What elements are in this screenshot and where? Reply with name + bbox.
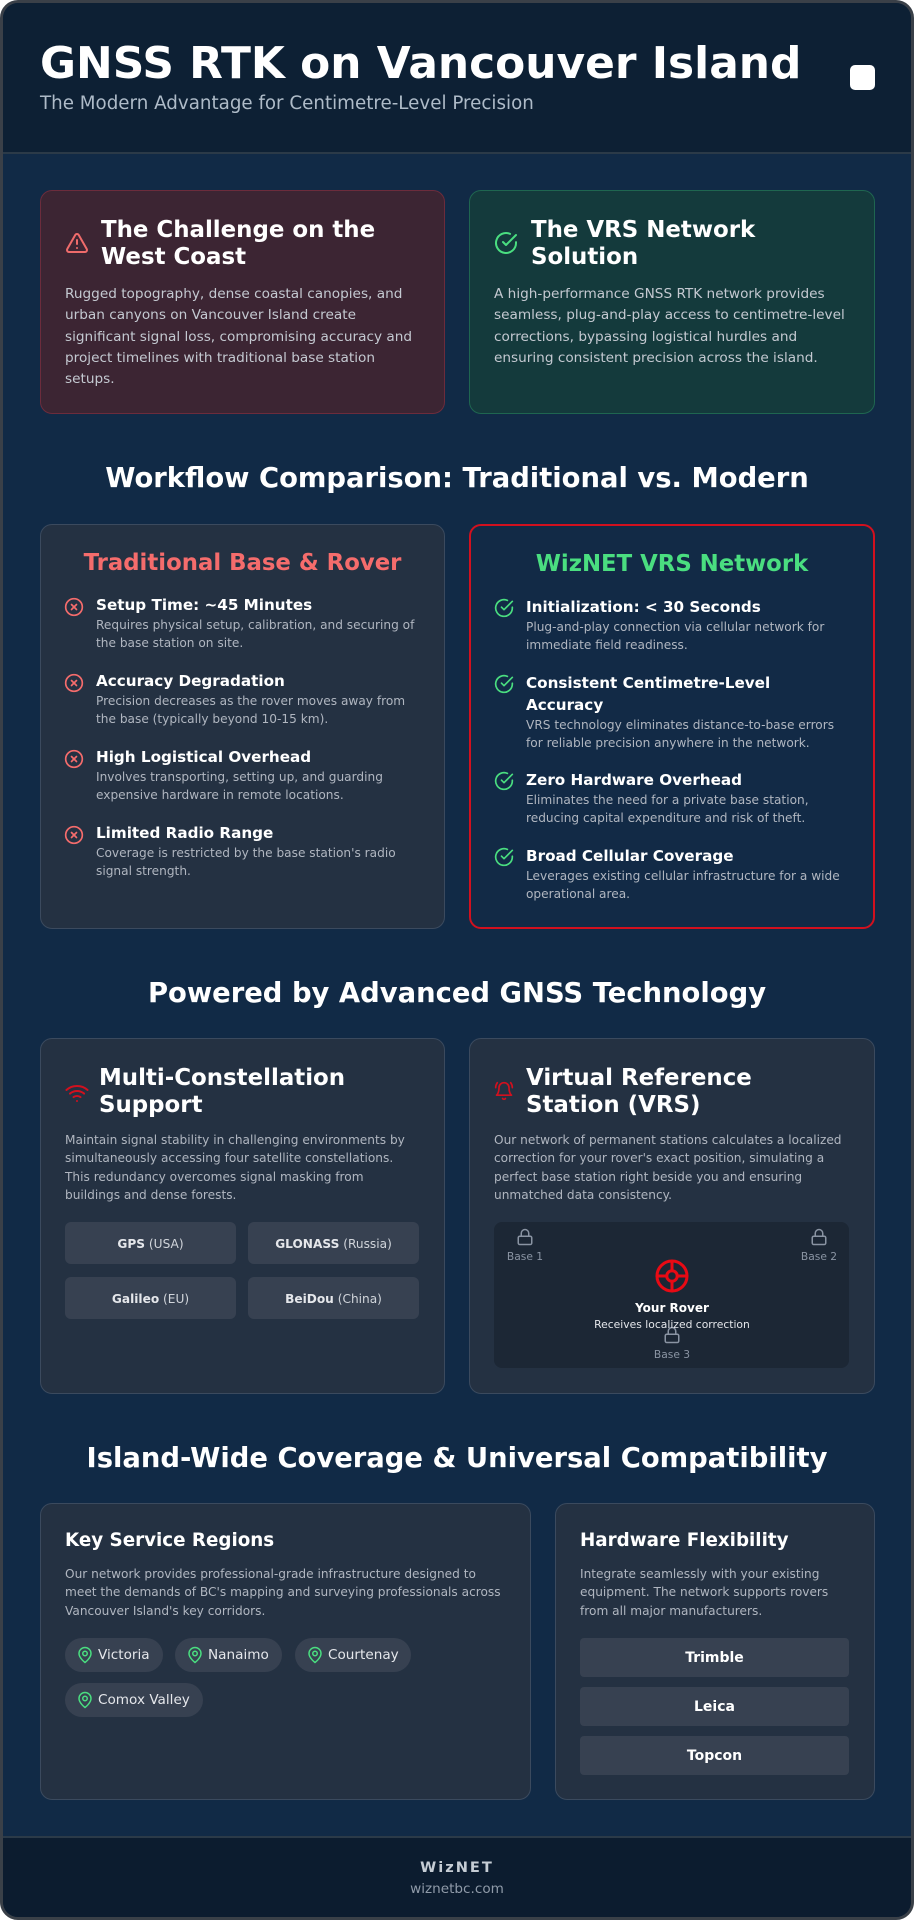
heading: The VRS Network Solution [531,217,755,270]
heading: The Challenge on the West Coast [101,217,375,270]
panel: traditional base and rover: Requires physical setup, calibration, and securing of the base station on site. [96,618,414,650]
list item: zero hardware overhead [494,771,809,825]
base 1 [507,1228,543,1263]
panel: WizNET VRS network: Accuracy [526,696,603,714]
rover label: Your Rover [635,1301,709,1315]
website: wiznetbc.com [410,1881,504,1897]
rover target [594,1260,750,1331]
heading: Key Service Regions [65,1530,274,1551]
region pill: Comox Valley [65,1683,203,1717]
panel: multi-constellation support [40,1038,445,1394]
heading: coverage and compatibility: Island-Wide Coverage & Universal Compatibility [87,1443,827,1474]
panel: traditional base and rover: Setup Time: ~45 Minutes [96,596,312,614]
brand: Leica: Leica [694,1699,735,1715]
column heading: Traditional Base & Rover [84,550,401,576]
chip: Galileo [65,1277,236,1319]
region pill: Victoria [65,1638,163,1672]
VRS diagram [494,1222,849,1368]
brand: Topcon [580,1736,849,1775]
panel: WizNET VRS network: Eliminates the need for a private base station, reducing capital expenditure and risk of theft. [526,793,809,825]
panel: WizNET VRS network: Plug-and-play connection via cellular network for immediate field readiness. [526,620,824,652]
body text: Our network of permanent stations calculates a localized correction for your rover's exact position, simulating a perfect base station right beside you and ensuring unmatched data consistency. [494,1133,842,1202]
header [0,0,914,154]
list item: logistical overhead [64,748,383,802]
heading: Hardware Flexibility [580,1530,788,1551]
footer [0,1836,914,1920]
list item: initialization [494,598,824,652]
column heading: WizNET VRS Network [536,551,808,577]
panel: the challenge [40,190,445,414]
body text: Our network provides professional-grade infrastructure designed to meet the demands of BC's mapping and surveying professionals across Vancouver Island's key corridors. [65,1567,501,1618]
panel: WizNET VRS network: VRS technology eliminates distance-to-base errors for reliable precision anywhere in the network. [526,718,834,750]
panel: the VRS solution [469,190,875,414]
chip: GLONASS: GLONASS (Russia) [275,1237,392,1251]
brand name: WizNET [420,1859,494,1876]
heading: Station (VRS) [526,1092,700,1118]
panel: WizNET VRS network: Consistent Centimetre-Level [526,674,770,692]
region pill: Courtenay [295,1638,411,1672]
region pill: Nanaimo: Nanaimo [208,1647,269,1663]
base 3: Base 3 [654,1348,690,1361]
heading: advanced technology: Powered by Advanced GNSS Technology [148,978,766,1009]
panel: key service regions [40,1503,531,1800]
region pill: Comox Valley: Comox Valley [98,1692,190,1708]
chip: BeiDou [248,1277,419,1319]
chip: BeiDou: BeiDou (China) [285,1292,382,1306]
panel: virtual reference station [469,1038,875,1394]
icon: bell [494,1082,514,1100]
list item: cellular coverage [494,847,840,901]
region pill: Victoria: Victoria [98,1647,150,1663]
panel: WizNET VRS network: Initialization: < 30 Seconds [526,598,761,616]
panel: hardware flexibility [555,1503,875,1800]
heading: Virtual Reference [526,1065,752,1091]
panel: traditional base and rover [40,524,445,929]
base 2 [801,1228,837,1263]
base 2: Base 2 [801,1250,837,1263]
panel: traditional base and rover: Coverage is restricted by the base station's radio signal strength. [96,846,396,878]
chip: GPS: GPS (USA) [117,1237,184,1251]
body text: Integrate seamlessly with your existing equipment. The network supports rovers from all major manufacturers. [580,1567,828,1618]
panel: WizNET VRS network: Leverages existing cellular infrastructure for a wide operational area. [526,869,840,901]
icon: wifi signal [65,1085,89,1102]
brand: Leica [580,1687,849,1726]
panel: traditional base and rover: Precision decreases as the rover moves away from the base (typically beyond 10-15 km). [96,694,405,726]
brand: Trimble: Trimble [685,1650,744,1666]
icon: rover crosshair [656,1260,688,1292]
panel: traditional base and rover: Involves transporting, setting up, and guarding expensive hardware in remote locations. [96,770,383,802]
panel: traditional base and rover: Accuracy Degradation [96,672,285,690]
panel: traditional base and rover: High Logistical Overhead [96,748,311,766]
title: GNSS RTK on Vancouver Island [40,38,801,89]
base 3 [654,1326,690,1361]
panel: WizNET VRS network: Broad Cellular Coverage [526,847,734,865]
list item: consistent accuracy [494,674,834,750]
body text: Maintain signal stability in challenging environments by simultaneously accessing four satellite constellations. This redundancy overcomes signal masking from buildings and dense forests. [65,1133,405,1202]
icon: check circle [494,232,517,254]
heading: workflow comparison: Workflow Comparison: Traditional vs. Modern [105,463,809,494]
region pill: Courtenay: Courtenay [328,1647,399,1663]
list item: radio range [64,824,396,878]
subtitle: The Modern Advantage for Centimetre-Level Precision [40,93,534,114]
chip: GLONASS [248,1222,419,1264]
panel: WizNET VRS network [469,524,875,929]
brand: Topcon: Topcon [687,1748,742,1764]
body text: Rugged topography, dense coastal canopies, and urban canyons on Vancouver Island create significant signal loss, compromising accuracy and project timelines with traditional base station setups. [65,286,412,387]
list item: accuracy degradation [64,672,405,726]
brand: Trimble [580,1638,849,1677]
panel: WizNET VRS network: Zero Hardware Overhead [526,771,742,789]
base 1: Base 1 [507,1250,543,1263]
panel: traditional base and rover: Limited Radio Range [96,824,273,842]
chip: GPS [65,1222,236,1264]
icon: warning triangle [66,233,88,253]
body text: A high-performance GNSS RTK network provides seamless, plug-and-play access to centimetre-level corrections, bypassing logistical hurdles and ensuring consistent precision across the island. [494,286,845,366]
heading: Multi-Constellation Support [99,1065,345,1118]
list item: setup time [64,596,415,650]
region pill: Nanaimo [175,1638,282,1672]
heading [526,1065,752,1118]
rover caption: Receives localized correction [594,1318,750,1331]
logo placeholder [850,65,875,90]
chip: Galileo: Galileo (EU) [112,1292,189,1306]
